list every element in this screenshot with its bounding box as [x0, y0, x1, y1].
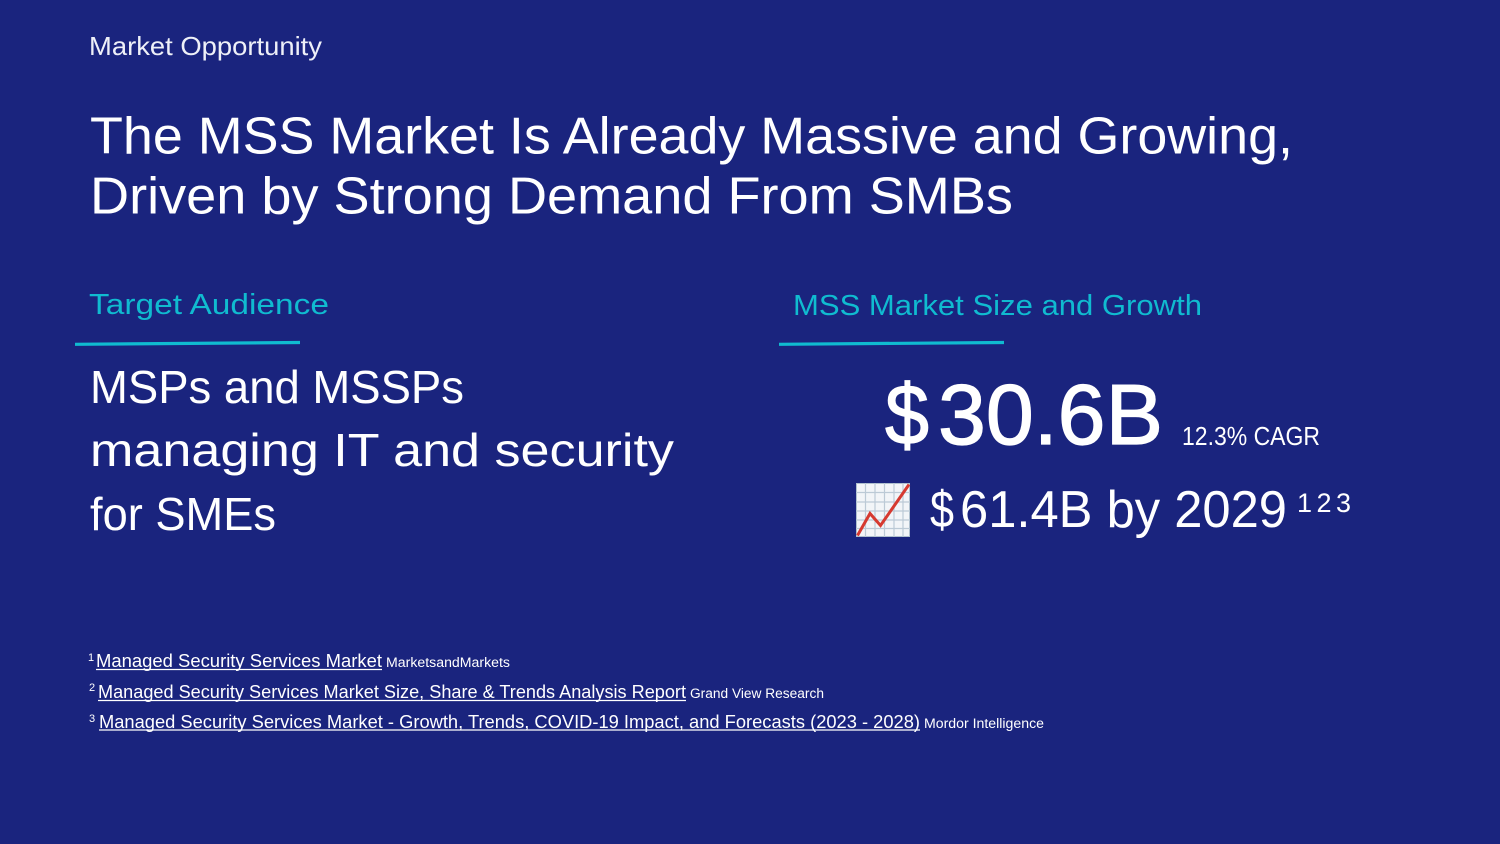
footnote 1: 1 — [88, 652, 94, 664]
footnote 1: MarketsandMarkets — [386, 655, 510, 670]
title: The MSS Market Is Already Massive and Growing, — [90, 108, 1293, 166]
section label: Market Opportunity — [89, 31, 322, 61]
footnotes — [88, 651, 1044, 732]
footnote 1: Managed Security Services Market — [96, 651, 382, 671]
heading: target audience: Target Audience — [89, 289, 329, 321]
footnote 3: Managed Security Services Market - Growth, Trends, COVID-19 Impact, and Forecasts (2023 - 2028) — [99, 712, 920, 732]
audience description: for SMEs — [90, 488, 276, 540]
stat: CAGR: 12.3% CAGR — [1182, 421, 1320, 451]
icon: rising chart — [856, 483, 910, 537]
title — [90, 108, 1293, 226]
stat: 2029 forecast: $ — [930, 481, 954, 539]
title: Driven by Strong Demand From SMBs — [90, 168, 1013, 226]
stat: 2029 forecast: 61.4B by 2029 — [960, 481, 1287, 539]
stat: current market size: $ — [885, 368, 929, 463]
citation markers: 1 2 3 — [1297, 488, 1351, 518]
footnote 1 — [88, 651, 510, 671]
footnote 3: Mordor Intelligence — [924, 716, 1044, 731]
footnote 2: Managed Security Services Market Size, Share & Trends Analysis Report — [98, 682, 686, 702]
footnote 2: Grand View Research — [690, 686, 824, 701]
audience description: managing IT and security — [90, 424, 674, 476]
audience description: MSPs and MSSPs — [90, 361, 464, 413]
heading: market size and growth: MSS Market Size and Growth — [793, 290, 1202, 322]
panel: target audience — [75, 289, 674, 540]
stat: current market size: 30.6B — [938, 368, 1163, 463]
panel: market size and growth — [779, 290, 1351, 539]
footnote 2: 2 — [89, 682, 95, 694]
audience description — [90, 361, 674, 540]
footnote 3: 3 — [89, 713, 95, 725]
